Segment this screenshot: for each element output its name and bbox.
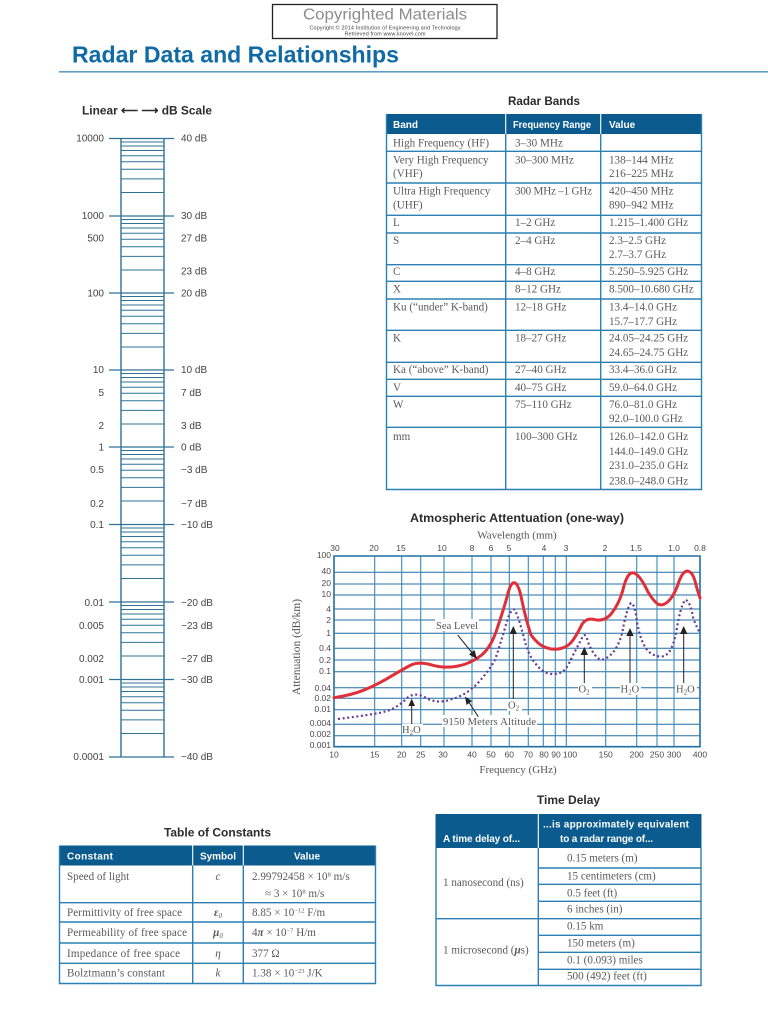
constant names: Impedance of free space: [67, 948, 180, 960]
symbols: 0: [219, 932, 223, 940]
values: 24.05–24.25 GHz: [609, 332, 688, 344]
linear labels: 100: [87, 288, 104, 300]
values: 231.0–235.0 GHz: [609, 460, 688, 472]
dB labels: 23 dB: [181, 266, 207, 278]
frequency ranges: 8–12 GHz: [515, 284, 561, 296]
band names: [393, 138, 491, 443]
copyright notice box: Copyrighted Materials: [303, 6, 467, 24]
linear labels: 5: [98, 388, 104, 399]
callout: water vapour 325 GHz: H: [676, 684, 684, 696]
x axis labels: 100: [563, 750, 577, 760]
table header: Constant: [67, 852, 114, 862]
frequency ranges: 100–300 GHz: [515, 431, 578, 443]
symbols: c: [216, 871, 221, 883]
constant values: m/s: [331, 871, 350, 883]
top axis labels: 5: [507, 543, 512, 553]
heading: atmospheric attenuation: Atmospheric Attentuation (one-way): [410, 511, 624, 525]
callout: oxygen 60 GHz: [507, 626, 522, 712]
y axis labels: 0.1: [319, 666, 331, 676]
frequency ranges: 4–8 GHz: [515, 266, 555, 278]
symbols: ε: [214, 907, 219, 919]
table header: Frequency Range: [513, 120, 591, 131]
y axis labels: [310, 550, 331, 750]
frequency ranges: 2–4 GHz: [515, 235, 555, 247]
band names: (UHF): [393, 200, 423, 212]
constant names: [67, 871, 187, 980]
constant values: 4π × 10: [252, 927, 287, 939]
top axis labels: 20: [369, 543, 379, 553]
table header: Value: [294, 852, 320, 862]
frequency ranges: [515, 138, 592, 443]
values: 5.250–5.925 GHz: [609, 266, 688, 278]
callout: water vapour 183 GHz: O: [632, 684, 640, 696]
table header: Symbol: [200, 852, 236, 862]
callout: 9150 meters altitude: 9150 Meters Altitude: [443, 717, 536, 728]
dB labels: 30 dB: [181, 211, 207, 222]
symbols: k: [216, 968, 222, 980]
values: 13.4–14.0 GHz: [609, 302, 677, 314]
callout: water vapour 325 GHz: O: [687, 684, 695, 696]
title: Radar Data and Relationships: [72, 42, 399, 68]
table header: [59, 846, 376, 866]
dB labels: 7 dB: [181, 388, 202, 399]
time delay labels: 1 nanosecond (ns): [443, 877, 524, 889]
constant values: −23: [294, 968, 304, 975]
constant values: ≈ 3 × 10: [265, 888, 302, 900]
frequency ranges: 75–110 GHz: [515, 399, 572, 411]
y axis labels: 0.2: [319, 655, 331, 665]
table header: to a radar range of...: [560, 834, 653, 845]
range values: 150 meters (m): [567, 938, 635, 950]
top axis labels: 15: [396, 543, 406, 553]
x axis labels: 400: [693, 750, 707, 760]
callout: oxygen 60 GHz: 2: [516, 704, 520, 712]
time delay labels: [443, 877, 529, 956]
top axis labels: 1.5: [630, 543, 642, 553]
sea level curve: [334, 571, 700, 698]
table header: Value: [609, 120, 636, 131]
dB labels: −40 dB: [181, 752, 213, 763]
constant values: 8: [302, 888, 306, 896]
y axis labels: 4: [326, 604, 331, 614]
linear labels: 0.2: [90, 499, 104, 510]
symbols: 0: [219, 912, 223, 920]
band names: Very High Frequency: [393, 154, 489, 166]
dB labels: −23 dB: [181, 621, 213, 632]
panel: table of constants: [59, 826, 376, 984]
linear labels: 0.01: [85, 598, 104, 609]
dB labels: −30 dB: [181, 675, 213, 686]
callout: oxygen 60 GHz: O: [508, 700, 516, 712]
top axis labels: 0.8: [694, 543, 706, 553]
callout: water vapour 183 GHz: H: [620, 684, 628, 696]
linear labels: 0.001: [79, 675, 104, 686]
x axis labels: 25: [416, 750, 426, 760]
y axis labels: 0.001: [310, 740, 331, 750]
constant values: F/m: [304, 907, 326, 919]
scale ladder: [109, 138, 174, 757]
constant values: J/K: [304, 968, 323, 980]
linear labels: 10000: [76, 134, 104, 144]
values: 8.500–10.680 GHz: [609, 284, 694, 296]
y axis labels: 0.02: [314, 693, 331, 703]
values: 24.65–24.75 GHz: [609, 347, 688, 359]
top axis labels: 2: [603, 543, 608, 553]
frequency ranges: 3–30 MHz: [515, 138, 563, 150]
table header: Band: [393, 120, 418, 131]
constant names: Permittivity of free space: [67, 907, 182, 919]
values: 238.0–248.0 GHz: [609, 476, 688, 488]
constant values: [252, 871, 350, 980]
linear labels: 10: [93, 365, 104, 376]
x axis labels: 300: [667, 750, 681, 760]
y axis labels: 1: [326, 628, 331, 638]
x axis labels: [329, 750, 707, 760]
table header: [436, 814, 702, 848]
x axis labels: 70: [524, 750, 533, 760]
panel: atmospheric attenuation chart: [291, 511, 707, 776]
range values: 15 centimeters (cm): [567, 870, 656, 882]
top axis labels: 6: [489, 543, 494, 553]
band names: Ultra High Frequency: [393, 186, 491, 198]
range values: 6 inches (in): [567, 904, 623, 916]
range values: 0.15 km: [567, 920, 604, 932]
constant values: H/m: [293, 927, 316, 939]
top axis labels: 8: [470, 543, 475, 553]
linear labels: 0.005: [79, 621, 104, 632]
callout: water vapour 183 GHz: [620, 628, 641, 696]
symbols: η: [215, 948, 221, 960]
x axis labels: 90: [551, 750, 561, 760]
callout: water vapour 22 GHz: 2: [410, 729, 414, 737]
constant values: −12: [294, 908, 304, 914]
y axis labels: 20: [322, 578, 331, 588]
frequency ranges: 300 MHz –1 GHz: [515, 186, 592, 198]
linear labels: 0.5: [90, 465, 104, 476]
top axis labels: 1.0: [668, 543, 680, 553]
x axis title: Frequency (GHz): [479, 764, 557, 776]
heading: table of constants: Table of Constants: [164, 826, 271, 840]
y axis title: Attenuation (dB/km): [291, 599, 303, 695]
callout: sea level: [435, 619, 479, 659]
range values: 0.5 feet (ft): [567, 888, 618, 900]
x axis labels: 10: [329, 750, 339, 760]
constant values: m/s: [306, 888, 324, 900]
values: [609, 154, 694, 488]
top axis labels: 4: [542, 543, 547, 553]
x axis labels: 60: [505, 750, 514, 760]
callout: sea level: Sea Level: [436, 621, 478, 632]
9150 meters altitude curve: [338, 600, 700, 719]
callout: 9150 meters altitude: [442, 696, 537, 728]
y axis labels: 0.4: [319, 643, 331, 653]
dB labels: 3 dB: [181, 421, 202, 432]
table grid: [59, 846, 376, 984]
values: 126.0–142.0 GHz: [609, 431, 688, 443]
x axis labels: 80: [539, 750, 549, 760]
band names: Ka (“above” K-band): [393, 364, 489, 376]
panel: radar bands table: [386, 94, 702, 490]
y axis labels: 0.004: [310, 718, 331, 728]
values: 890–942 MHz: [609, 200, 673, 212]
y axis labels: 2: [326, 615, 331, 625]
callout: water vapour 325 GHz: 2: [684, 688, 688, 696]
band names: W: [393, 399, 404, 411]
values: 216–225 MHz: [609, 168, 673, 180]
constant values: 8.85 × 10: [252, 907, 294, 919]
values: 1.215–1.400 GHz: [609, 217, 688, 229]
band names: (VHF): [393, 168, 423, 180]
table grid: [436, 848, 701, 986]
dB labels: 20 dB: [181, 288, 207, 300]
dB labels: −20 dB: [181, 598, 213, 609]
frequency ranges: 12–18 GHz: [515, 302, 567, 314]
heading: radar bands: Radar Bands: [508, 94, 580, 108]
x axis labels: 150: [599, 750, 613, 760]
band names: S: [393, 235, 399, 247]
table grid: [386, 114, 702, 490]
callout: water vapour 325 GHz: [675, 626, 697, 696]
table header: A time delay of...: [443, 834, 520, 845]
frequency ranges: 30–300 MHz: [515, 154, 574, 166]
frequency ranges: 18–27 GHz: [515, 332, 567, 344]
panel: time delay table: [436, 793, 702, 986]
band names: V: [393, 382, 401, 394]
values: 33.4–36.0 GHz: [609, 364, 677, 376]
constant values: 377 Ω: [252, 948, 280, 960]
constant names: Bolztmann’s constant: [67, 968, 166, 980]
constant values: −7: [287, 928, 294, 934]
callout: water vapour 22 GHz: O: [413, 725, 421, 736]
linear labels: 2: [98, 421, 104, 432]
x axis labels: 40: [467, 750, 477, 760]
time delay labels: 1 microsecond (μs): [443, 944, 529, 956]
y axis labels: 0.01: [314, 704, 331, 714]
y axis labels: 40: [322, 566, 331, 576]
callout: water vapour 22 GHz: [402, 698, 423, 737]
range values: [567, 852, 656, 982]
chart grid: [334, 556, 700, 747]
values: 138–144 MHz: [609, 154, 673, 166]
dB labels: −10 dB: [181, 520, 213, 531]
linear labels: 500: [87, 234, 104, 244]
values: 420–450 MHz: [609, 186, 673, 198]
x axis labels: 15: [370, 750, 380, 760]
dB labels: 27 dB: [181, 234, 207, 244]
linear labels: 0.0001: [73, 752, 104, 763]
band names: X: [393, 284, 401, 296]
x axis labels: 30: [438, 750, 448, 760]
values: 2.7–3.7 GHz: [609, 249, 666, 261]
x axis labels: 20: [397, 750, 407, 760]
dB labels: −27 dB: [181, 654, 213, 665]
values: 15.7–17.7 GHz: [609, 316, 677, 328]
constant values: 2.99792458 × 10: [252, 871, 328, 883]
top axis labels: 3: [564, 543, 569, 553]
band names: mm: [393, 431, 411, 443]
dB labels: 0 dB: [181, 442, 202, 454]
y axis labels: 100: [317, 550, 331, 560]
linear labels: 1000: [82, 211, 104, 222]
callout: oxygen 118 GHz: [578, 647, 592, 696]
copyright notice box: Retrieved from www.knovel.com: [344, 32, 426, 38]
linear labels: 0.002: [79, 654, 104, 665]
band names: Ku (“under” K-band): [393, 302, 488, 314]
y axis labels: 0.04: [314, 683, 331, 693]
values: 144.0–149.0 GHz: [609, 446, 688, 458]
frequency ranges: 27–40 GHz: [515, 364, 567, 376]
callout: oxygen 118 GHz: O: [578, 684, 586, 696]
constant values: 1.38 × 10: [252, 968, 294, 980]
linear labels: [73, 134, 104, 763]
heading: linear dB scale: Linear ⟵ ⟶ dB Scale: [82, 104, 212, 118]
symbols: [212, 871, 223, 980]
dB labels: [181, 134, 213, 763]
band names: High Frequency (HF): [393, 138, 489, 150]
callout: oxygen 118 GHz: 2: [586, 688, 590, 696]
band names: L: [393, 217, 400, 229]
x axis labels: 200: [630, 750, 644, 760]
frequency ranges: 40–75 GHz: [515, 382, 567, 394]
panel: linear to dB scale: [73, 104, 213, 763]
range values: 0.15 meters (m): [567, 852, 638, 864]
range values: 500 (492) feet (ft): [567, 970, 647, 982]
band names: C: [393, 266, 400, 278]
copyright notice box: [272, 4, 497, 38]
band names: K: [393, 332, 401, 344]
constant values: 8: [328, 872, 331, 878]
x axis labels: 250: [650, 750, 664, 760]
table header: [386, 114, 702, 134]
x axis labels: 50: [486, 750, 496, 760]
top axis labels: [330, 543, 706, 553]
callout: water vapour 22 GHz: H: [402, 725, 410, 736]
values: 59.0–64.0 GHz: [609, 382, 677, 394]
constant names: Permeability of free space: [67, 927, 187, 939]
callout: water vapour 183 GHz: 2: [628, 688, 632, 696]
dB labels: 10 dB: [181, 365, 207, 376]
top axis labels: 30: [330, 543, 340, 553]
linear labels: 1: [98, 442, 104, 454]
top axis labels: 10: [437, 543, 447, 553]
values: 2.3–2.5 GHz: [609, 235, 666, 247]
frequency ranges: 1–2 GHz: [515, 217, 555, 229]
range values: 0.1 (0.093) miles: [567, 954, 643, 966]
top axis title: Wavelength (mm): [477, 530, 557, 542]
y axis labels: 10: [322, 589, 331, 599]
linear labels: 0.1: [90, 520, 104, 531]
dB labels: 40 dB: [181, 134, 207, 144]
table header: ...is approximately equivalent: [543, 820, 690, 830]
values: 92.0–100.0 GHz: [609, 413, 683, 425]
symbols: μ: [213, 927, 219, 939]
y axis labels: 0.002: [310, 729, 331, 739]
copyright notice box: Copyright © 2014 Institution of Engineering and Technology: [310, 24, 461, 32]
dB labels: −7 dB: [181, 499, 208, 510]
values: 76.0–81.0 GHz: [609, 399, 677, 411]
heading: time delay: Time Delay: [537, 793, 600, 807]
constant names: Speed of light: [67, 871, 130, 883]
dB labels: −3 dB: [181, 465, 208, 476]
